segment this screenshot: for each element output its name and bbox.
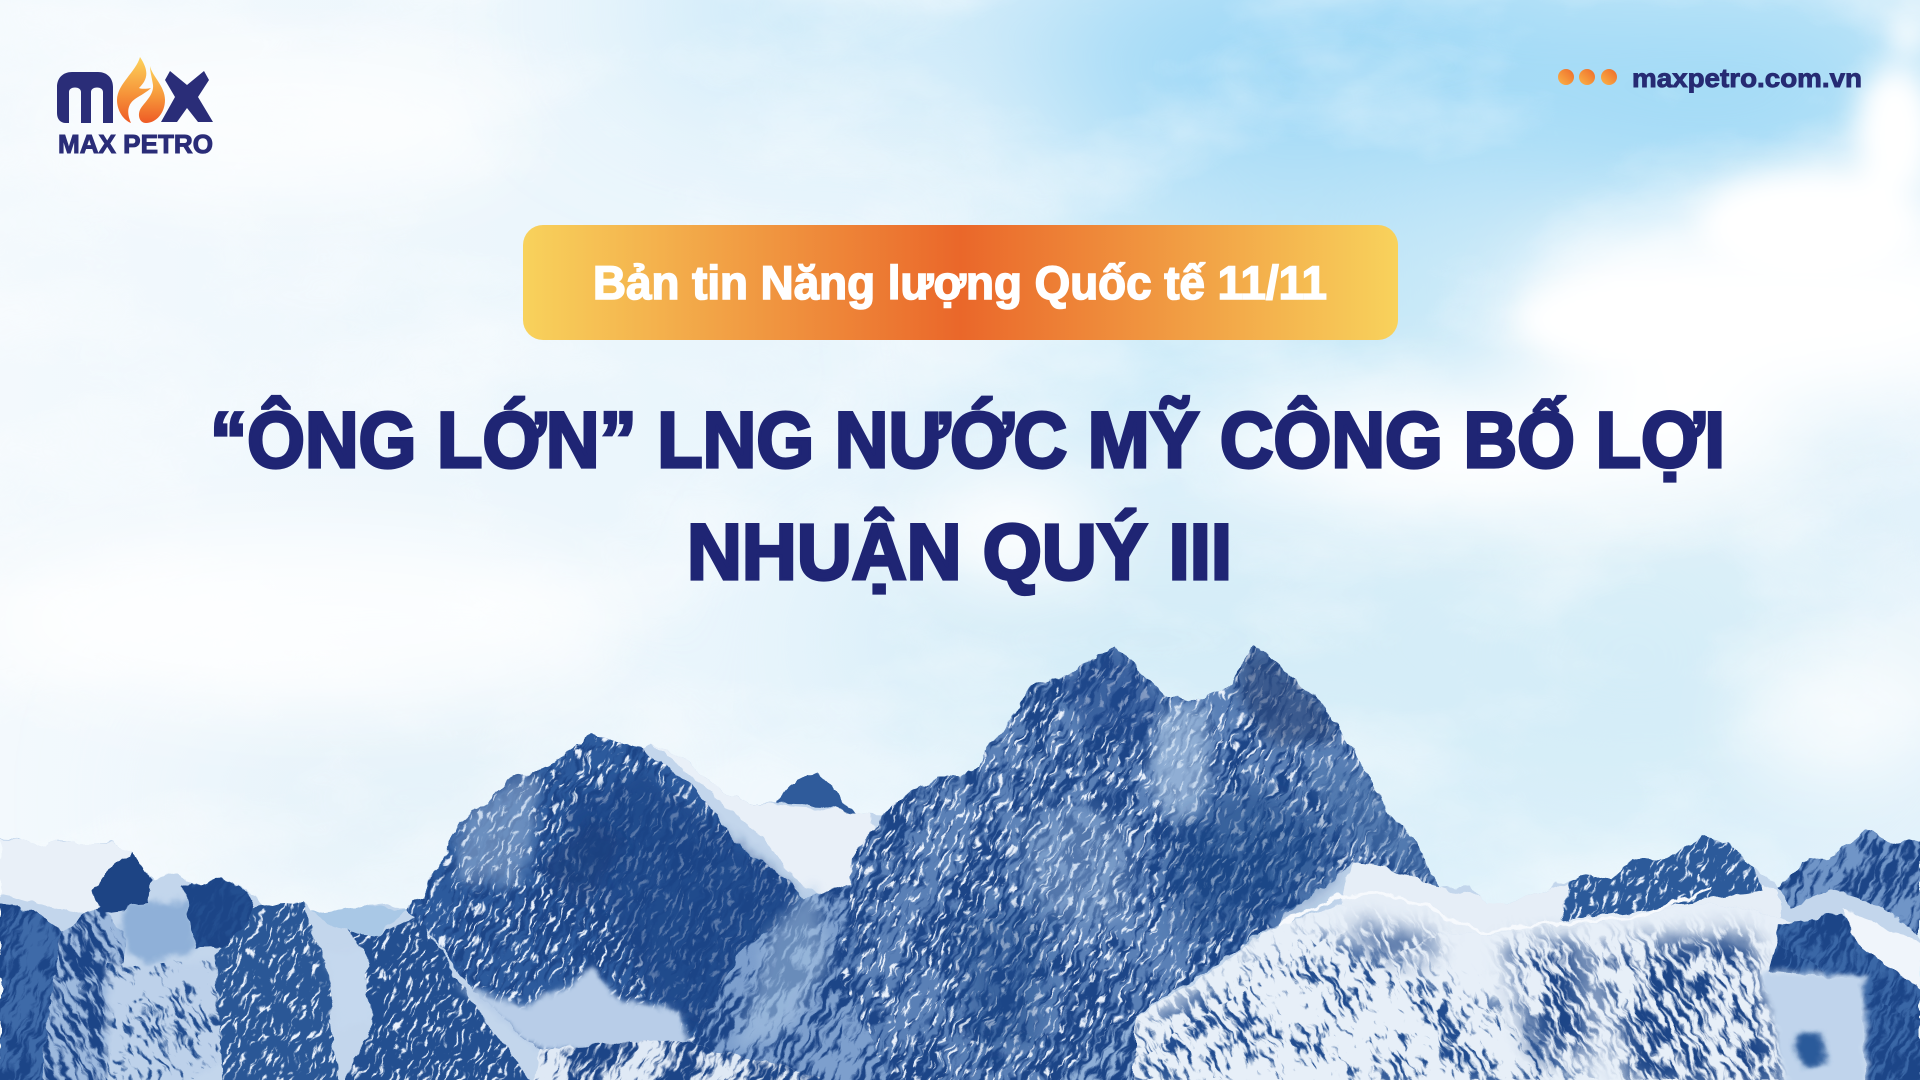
logo letter x	[161, 71, 213, 122]
valley rock below glacier	[534, 884, 889, 1080]
logo: Max Petro	[57, 57, 213, 159]
date banner pill	[523, 225, 1398, 340]
banner text: Bản tin Năng lượng Quốc tế 11/11	[593, 256, 1327, 309]
glacier snowfield	[652, 743, 882, 900]
big twin peak	[840, 647, 1441, 1080]
logo wordmark: MAX PETRO	[58, 129, 213, 159]
main headline	[210, 394, 1725, 596]
small dark peak	[775, 773, 854, 815]
main left peak	[404, 735, 802, 1050]
left rocky cluster	[0, 838, 545, 1080]
website link with three dots	[1558, 63, 1862, 93]
snow ridge line	[1278, 890, 1710, 930]
website address: maxpetro.com.vn	[1632, 63, 1862, 93]
logo letter m	[57, 72, 113, 123]
headline line 2: NHUẬN QUÝ III	[687, 507, 1232, 596]
foreground snow slopes	[1040, 863, 1920, 1080]
headline line 1: “ÔNG LỚN” LNG NƯỚC MỸ CÔNG BỐ LỢI	[210, 395, 1725, 484]
rear right rocks	[1560, 830, 1920, 935]
three orange dots	[1558, 69, 1617, 85]
mountain range	[0, 645, 1920, 1080]
logo flame	[117, 57, 165, 123]
